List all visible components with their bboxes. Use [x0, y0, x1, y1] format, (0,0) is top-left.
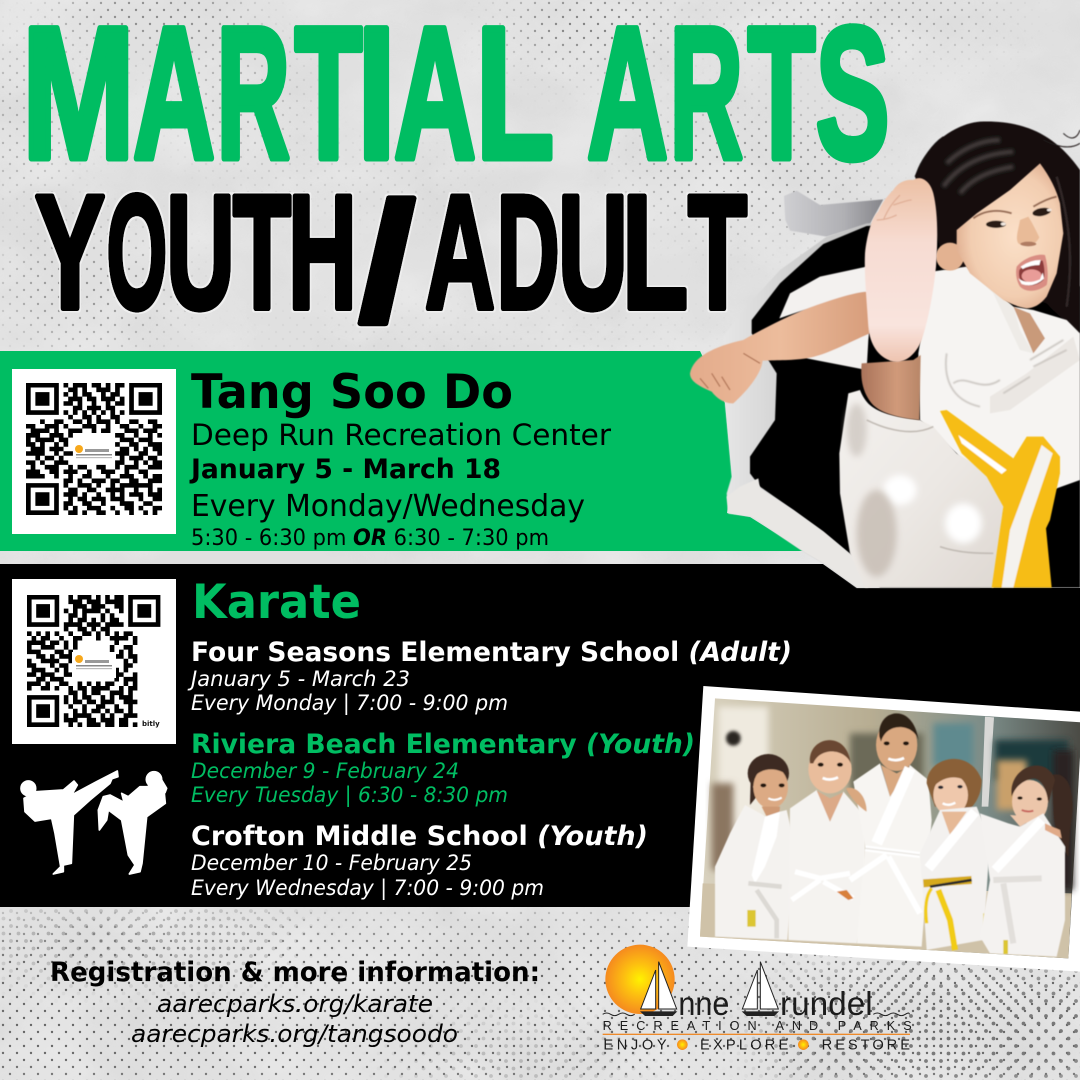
- QR code: Karate: [12, 579, 176, 744]
- black hole behind the girl: [750, 220, 1080, 588]
- location: Riviera Beach: Riviera Beach Elementary (Youth): [191, 729, 695, 760]
- heading: Tang Soo Do: Tang Soo Do: [191, 365, 513, 420]
- torn paper flap: [784, 191, 883, 237]
- days: Every Monday/Wednesday: [191, 489, 585, 524]
- logo enjoy tagline: ENJOY: [603, 1037, 667, 1053]
- Riviera Beach schedule: Every Tuesday | 6:30 - 8:30 pm: [191, 783, 508, 808]
- text block: registration information: [50, 957, 540, 1048]
- icon: two martial arts kicking silhouettes: [21, 771, 167, 874]
- subtitle: YOUTH/ADULT: L: [622, 162, 688, 343]
- nose: [1017, 217, 1039, 246]
- Crofton schedule: Every Wednesday | 7:00 - 9:00 pm: [191, 876, 544, 901]
- times: 5:30 - 6:30 pm OR 6:30 - 7:30 pm: [191, 526, 549, 551]
- shin: [861, 355, 921, 420]
- child 1: [715, 754, 795, 940]
- left fighter: [21, 771, 118, 874]
- subtitle: YOUTH/ADULT: O: [107, 162, 167, 343]
- sleeve and arm: [690, 267, 872, 403]
- photo: group of five children in white gis: [687, 686, 1080, 972]
- child 5: [980, 766, 1073, 957]
- Four Seasons schedule: Every Monday | 7:00 - 9:00 pm: [191, 691, 508, 716]
- dates: January 5 - March 18: [189, 454, 501, 485]
- panel: green Tang Soo Do band: [0, 351, 804, 551]
- logo sailboat B: [742, 962, 779, 1016]
- bitly mark: bitly: [142, 720, 160, 728]
- subtitle: YOUTH/ADULT: D: [497, 162, 560, 343]
- subtitle: YOUTH/ADULT: T: [688, 162, 747, 343]
- subtitle: YOUTH/ADULT: H: [288, 162, 357, 343]
- panel: black Karate band: [0, 564, 1080, 907]
- registration heading: Registration & more information:: [50, 957, 540, 988]
- logo enjoy tagline: RESTORE: [822, 1037, 910, 1053]
- link: karate: aarecparks.org/karate: [157, 990, 433, 1018]
- white photo frame: [687, 686, 1080, 972]
- logo sun: [605, 945, 675, 1014]
- hair: [915, 122, 1080, 333]
- photo: torn paper hole with kicking girl: [690, 122, 1080, 588]
- QR code: Tang Soo Do: [12, 369, 176, 534]
- white torn strip: [727, 478, 868, 588]
- subtitle: YOUTH/ADULT: /: [359, 168, 415, 356]
- QR centre mini logo: [75, 655, 112, 669]
- logo recreation and parks line: RECREATION AND PARKS: [603, 1019, 912, 1033]
- QR data modules: [29, 595, 135, 727]
- logo sailboat A: [640, 962, 677, 1016]
- logo waves: [603, 1013, 909, 1016]
- location: Four Seasons: Four Seasons Elementary School (Adult): [191, 637, 792, 668]
- right fighter: [98, 772, 167, 874]
- eyes: [986, 221, 1006, 228]
- mouth: [1016, 255, 1048, 291]
- location: Deep Run Recreation Center: [191, 418, 611, 452]
- link: tang soo do: aarecparks.org/tangsoodo: [131, 1020, 458, 1048]
- text block: Karate details: [187, 575, 792, 901]
- child 2: [788, 740, 865, 943]
- gi torso: [918, 267, 1080, 513]
- child 3: [846, 713, 932, 947]
- text block: Tang Soo Do details: [189, 365, 611, 551]
- logo enjoy tagline: EXPLORE: [700, 1037, 789, 1053]
- subtitle: YOUTH/ADULT: U: [166, 162, 235, 343]
- heading: Karate: Karate: [192, 575, 361, 630]
- subtitle: YOUTH/ADULT: Y: [35, 162, 105, 343]
- logo enjoy tagline: [603, 1037, 910, 1053]
- child 4: [920, 759, 990, 950]
- subtitle: YOUTH/ADULT: T: [233, 162, 291, 343]
- logo: Anne Arundel Recreation and Parks: [603, 945, 912, 1053]
- QR data modules: [26, 385, 162, 513]
- location: Crofton Middle: Crofton Middle School (Youth): [191, 821, 648, 852]
- face: [936, 163, 1063, 308]
- yellow belt: [940, 410, 1060, 588]
- Riviera Beach dates: December 9 - February 24: [191, 759, 459, 783]
- sole of the foot: [865, 178, 937, 362]
- eyebrows: [973, 197, 1057, 218]
- logo wordmark: nne: [678, 986, 729, 1023]
- subtitle: YOUTH/ADULT: A: [425, 162, 495, 343]
- Four Seasons dates: January 5 - March 23: [187, 667, 410, 691]
- QR finder patterns: [26, 383, 162, 515]
- torn paper ring: [723, 220, 980, 588]
- QR finder patterns: [27, 595, 160, 727]
- blurred dojo background: [700, 698, 1080, 958]
- logo orange rule: [603, 1034, 910, 1035]
- trouser leg: [839, 390, 1015, 588]
- QR centre mini logo: [75, 445, 112, 458]
- white patch for mini logo: [72, 652, 116, 678]
- subtitle: YOUTH/ADULT: U: [558, 162, 628, 343]
- logo wordmark second part: rundel: [780, 986, 873, 1023]
- Crofton dates: December 10 - February 25: [191, 851, 472, 875]
